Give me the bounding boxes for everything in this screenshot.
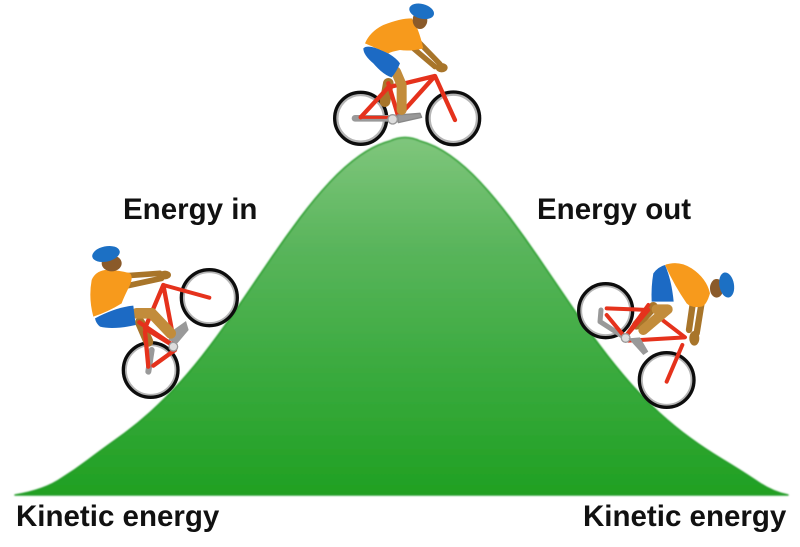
label: kinetic energy left: Kinetic energy: [16, 500, 220, 533]
label: kinetic energy right: Kinetic energy: [583, 500, 787, 533]
cyclist at the top of the hill: [335, 1, 480, 145]
label: energy out: Energy out: [537, 193, 691, 226]
cyclist climbing on the left: [90, 244, 237, 397]
cyclist descending on the right: [579, 263, 736, 407]
green hill: [15, 138, 788, 495]
label: energy in: Energy in: [123, 193, 257, 226]
